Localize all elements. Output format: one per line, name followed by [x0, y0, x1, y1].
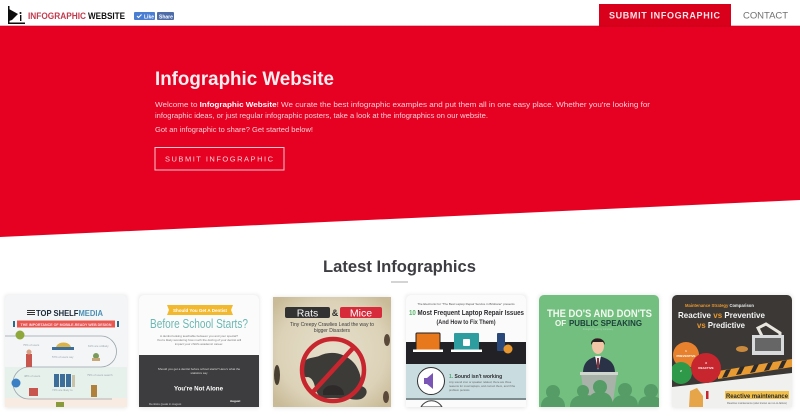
- card 2: before school starts: [139, 295, 259, 407]
- card banner: [17, 320, 115, 328]
- speaker: [580, 338, 618, 402]
- card 4: laptop repair: (And How to Fix Them): [436, 320, 496, 326]
- section heading: Latest Infographics: [323, 257, 476, 276]
- card chalkboard text: [158, 368, 240, 390]
- dark band: [406, 342, 526, 364]
- card icons: [26, 354, 32, 367]
- logo wordmark: INFOGRAPHIC: [28, 11, 86, 21]
- card 2: before school starts: Should You Get A Dentist: [173, 308, 228, 313]
- hero content: [155, 69, 650, 170]
- robot arm and monitor: [736, 324, 784, 355]
- card timeline path: [5, 336, 116, 399]
- hero button: SUBMIT INFOGRAPHIC: [165, 154, 274, 164]
- card body text: 79% of users search: [87, 373, 113, 377]
- card 6: maintenance comparison: vs Predictive: [697, 320, 745, 330]
- card body text: 75% of users: [23, 343, 40, 347]
- card 3: rats and mice: &: [332, 308, 339, 318]
- next icon: [421, 401, 442, 407]
- hero paragraph: infographic ideas, or just regular infographic posters, take a look at the infographics on our website.: [155, 111, 488, 120]
- hero red background: [0, 26, 800, 237]
- card intro text: A dentist looking teachable between you and your special?: [160, 334, 238, 338]
- hazard stripes: [718, 359, 792, 379]
- card body text: 57% of users say: [52, 355, 74, 359]
- card 5: public speaking: OF: [555, 319, 566, 328]
- section text: 1. Sound isn't working: [449, 374, 502, 380]
- card 4: laptop repair: [406, 295, 526, 407]
- card chalkboard text: Should you get a dentist before school starts? Here's what the: [158, 367, 241, 371]
- card 1: top shelf media: THE IMPORTANCE OF MOBILE-READY WEB DESIGN: [21, 323, 112, 327]
- laptops: [413, 333, 443, 352]
- card body text: 61% are unlikely: [88, 344, 109, 348]
- phone and clock: [497, 333, 512, 354]
- card 4: laptop repair: Any sound icon or speaker related, there are three: [449, 380, 512, 384]
- card 5: public speaking: brought to you by company: [583, 328, 614, 331]
- card body text: 74% are likely to: [52, 388, 73, 392]
- card banner: [167, 305, 233, 315]
- card subtitle: Tiny Creepy Crawlies Lead the way to: [290, 322, 374, 328]
- card title: THE DO'S AND DON'TS: [547, 308, 652, 320]
- rats label: Rats: [297, 308, 318, 320]
- gears: 1: [685, 349, 687, 353]
- mice label: Mice: [350, 308, 372, 320]
- card subtitle: [290, 322, 374, 334]
- hero title: Infographic Website: [155, 69, 334, 90]
- card title: Reactive vs Preventive: [678, 310, 765, 320]
- card subtitle: bigger Disasters: [314, 328, 351, 334]
- card 4: laptop repair: reasons for most laptops, and correct them, and if the: [449, 384, 516, 388]
- hero paragraph: Got an infographic to share? Get started below!: [155, 125, 313, 134]
- card intro text: impact your child's academic career.: [175, 342, 223, 346]
- card body text: 48% of users: [24, 374, 41, 378]
- mouse silhouette: [323, 385, 344, 395]
- section heading: Reactive maintenance: [726, 393, 788, 400]
- gears: 3: [705, 361, 707, 365]
- header logo: [8, 6, 125, 24]
- card 1: top shelf media: [5, 295, 127, 407]
- card body text: [23, 343, 113, 392]
- card chalkboard text: You're Not Alone: [174, 386, 223, 392]
- gears: PREVENTIVE: [676, 354, 696, 358]
- prohibition sign: [302, 339, 364, 401]
- card title: 10 Most Frequent Laptop Repair Issues: [409, 310, 524, 317]
- card kicker: Maintenance Strategy Comparison: [685, 303, 754, 308]
- hero paragraph: [155, 100, 650, 134]
- card intro text: [157, 335, 241, 346]
- warning figure: [689, 388, 708, 407]
- card title: TOP SHELFMEDIA: [36, 308, 103, 318]
- card 2: before school starts: Dentists (peak in August: [149, 402, 182, 406]
- icon: logo flag: [8, 6, 25, 24]
- nav: contact link: CONTACT: [743, 10, 788, 22]
- nav: submit tab: SUBMIT INFOGRAPHIC: [609, 10, 720, 20]
- gears: [670, 342, 721, 384]
- sound icon: [418, 368, 444, 394]
- gears: REACTIVE: [698, 366, 714, 370]
- card 5: public speaking: [539, 295, 662, 407]
- card title: Before School Starts?: [150, 316, 248, 331]
- card chalkboard text: statistics say: [190, 371, 208, 375]
- like button: Like: [144, 14, 154, 20]
- logo wordmark: WEBSITE: [88, 11, 125, 21]
- rat silhouette: [302, 353, 367, 400]
- gears: 2: [680, 369, 682, 373]
- card 2: before school starts: August: [230, 399, 240, 403]
- card shadows: [5, 295, 792, 408]
- bottom light area: [672, 373, 792, 407]
- blue section: [406, 364, 526, 398]
- social buttons: [134, 12, 174, 20]
- hero paragraph: Welcome to Infographic Website ! We curate the best infographic examples and put them all in one easy place. Whether you're looking for: [155, 100, 650, 109]
- hero button: [155, 148, 284, 170]
- nav: submit tab: [599, 4, 731, 27]
- audience silhouettes: [541, 380, 662, 407]
- card intro text: You're likely wondering how much the dozing of your dentist will: [157, 338, 242, 342]
- section text: Reactive maintenance (also known as run-to-failure): [727, 401, 787, 405]
- card 6: maintenance comparison: [670, 295, 792, 407]
- logo wordmark: [28, 11, 125, 21]
- card 4: laptop repair: problem persists: [449, 388, 470, 392]
- card 3: rats and mice: [273, 297, 391, 407]
- card 5: public speaking: PUBLIC SPEAKING: [569, 319, 642, 328]
- share button: Share: [159, 14, 173, 20]
- card kicker: The Electronic for "The Best Laptop Repair Service in Brisbane" presents: [417, 302, 515, 306]
